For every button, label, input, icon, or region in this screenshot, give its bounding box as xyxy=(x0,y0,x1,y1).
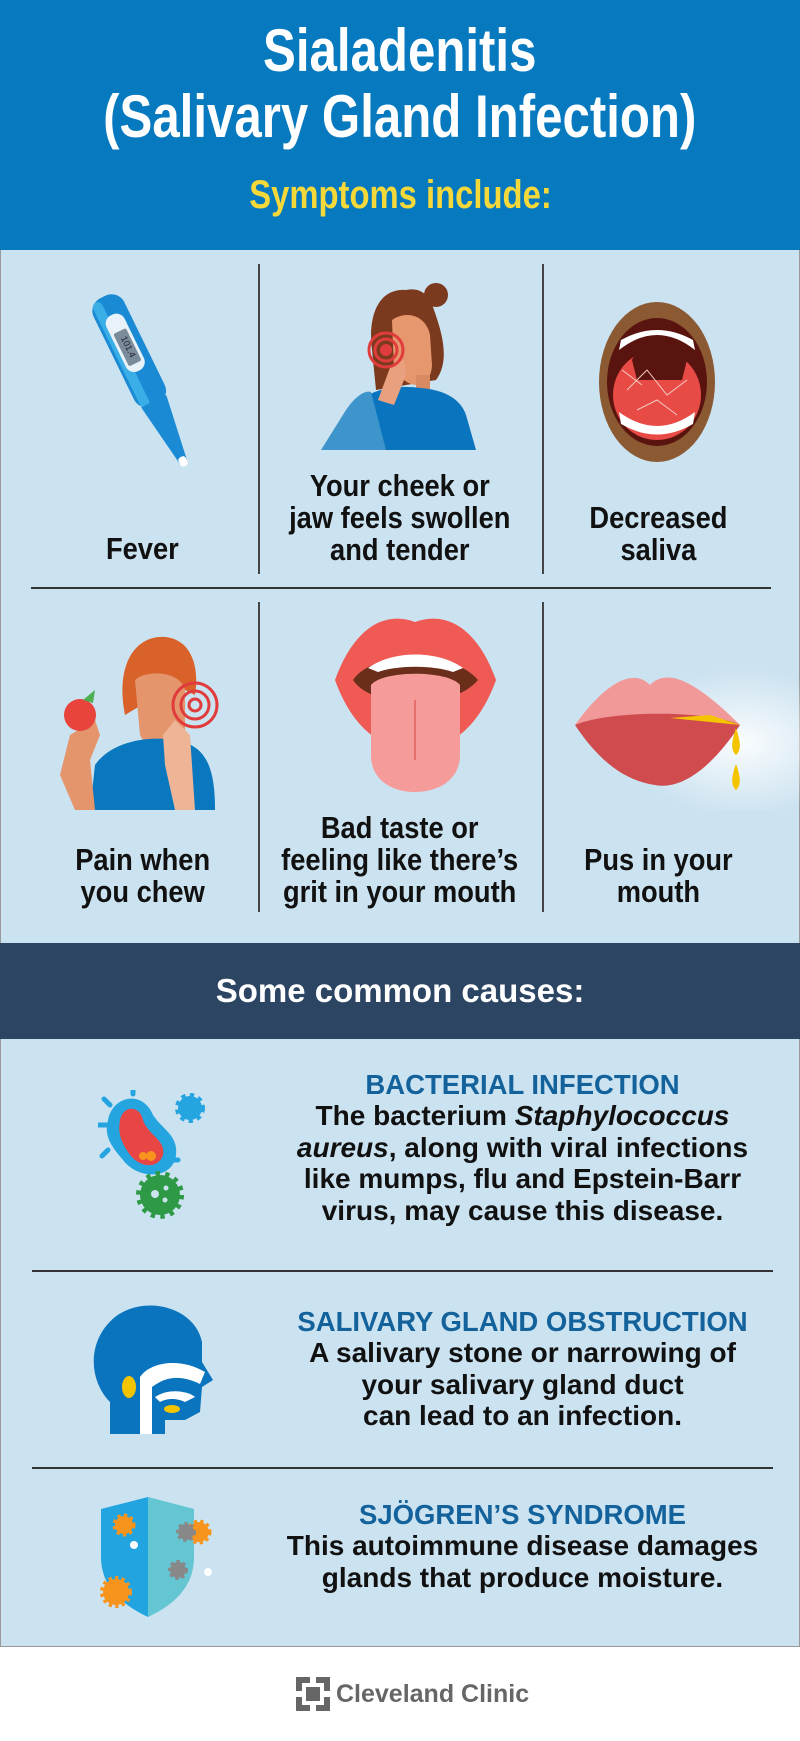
label: pain when chew xyxy=(75,842,210,909)
icon: boy chewing apple xyxy=(60,636,218,810)
icon: shield xyxy=(100,1497,212,1617)
footer logo xyxy=(296,1677,529,1711)
text: obstruction: your salivary gland duct xyxy=(361,1368,684,1400)
text: sjogren: glands that produce moisture. xyxy=(322,1562,723,1592)
label: cheek swollen: and tender xyxy=(330,532,470,567)
label: pus xyxy=(584,842,732,909)
text: bacterial infection xyxy=(297,1069,748,1226)
text: bacterial infection: BACTERIAL INFECTION xyxy=(365,1069,680,1100)
header band xyxy=(0,0,800,250)
label: bad taste: grit in your mouth xyxy=(283,874,517,909)
footer logo: Cleveland Clinic xyxy=(336,1680,529,1708)
label: cheek swollen xyxy=(288,468,511,567)
label: decreased saliva: saliva xyxy=(620,532,696,567)
text: bacterial infection: The bacterium Staphylococcus xyxy=(316,1100,729,1131)
icon: lips with pus xyxy=(575,678,800,804)
panel: symptoms xyxy=(0,250,800,945)
label: cheek swollen: jaw feels swollen xyxy=(289,500,511,535)
text: bacterial infection: aureus, along with viral infections xyxy=(297,1132,748,1162)
icon: thermometer: 101.4 xyxy=(119,335,138,359)
icon: thermometer xyxy=(92,294,188,467)
text: sjogren: SJÖGREN’S SYNDROME xyxy=(359,1499,686,1530)
text: bacterial infection: virus, may cause this disease. xyxy=(322,1194,723,1226)
text: sjogren xyxy=(287,1499,758,1593)
icon: woman holding cheek xyxy=(321,283,476,450)
subtitle: symptoms include: Symptoms include: xyxy=(249,173,551,217)
text: sjogren: This autoimmune disease damages xyxy=(287,1530,758,1561)
label: pain when chew: Pain when xyxy=(75,842,210,877)
icon: bacteria xyxy=(98,1090,205,1219)
label: decreased saliva xyxy=(589,500,727,567)
label: pain when chew: you chew xyxy=(80,874,205,909)
label: bad taste: feeling like there’s xyxy=(281,842,519,877)
label: fever: Fever xyxy=(106,531,179,566)
icon: tongue out xyxy=(335,618,496,792)
causes heading band xyxy=(0,943,800,1039)
icon: cleveland clinic cross xyxy=(296,1677,330,1711)
title: (Salivary Gland Infection) xyxy=(103,83,697,150)
text: bacterial infection: like mumps, flu and Epstein-Barr xyxy=(304,1163,741,1194)
text: obstruction xyxy=(297,1306,748,1431)
label: bad taste: Bad taste or xyxy=(321,810,479,845)
icon: dry open mouth xyxy=(599,302,715,462)
panel: causes xyxy=(0,1039,800,1647)
label: pus: mouth xyxy=(616,874,700,909)
label: decreased saliva: Decreased xyxy=(589,500,727,535)
title: Sialadenitis xyxy=(263,17,537,84)
label: cheek swollen: Your cheek or xyxy=(310,468,490,503)
text: obstruction: SALIVARY GLAND OBSTRUCTION xyxy=(297,1306,748,1337)
label: bad taste xyxy=(281,810,519,909)
text: obstruction: A salivary stone or narrowing of xyxy=(309,1337,736,1368)
icon: head profile xyxy=(94,1306,213,1434)
causes heading band: Some common causes: xyxy=(216,972,584,1009)
label: pus: Pus in your xyxy=(584,842,732,877)
text: obstruction: can lead to an infection. xyxy=(363,1400,682,1431)
title xyxy=(103,17,697,150)
